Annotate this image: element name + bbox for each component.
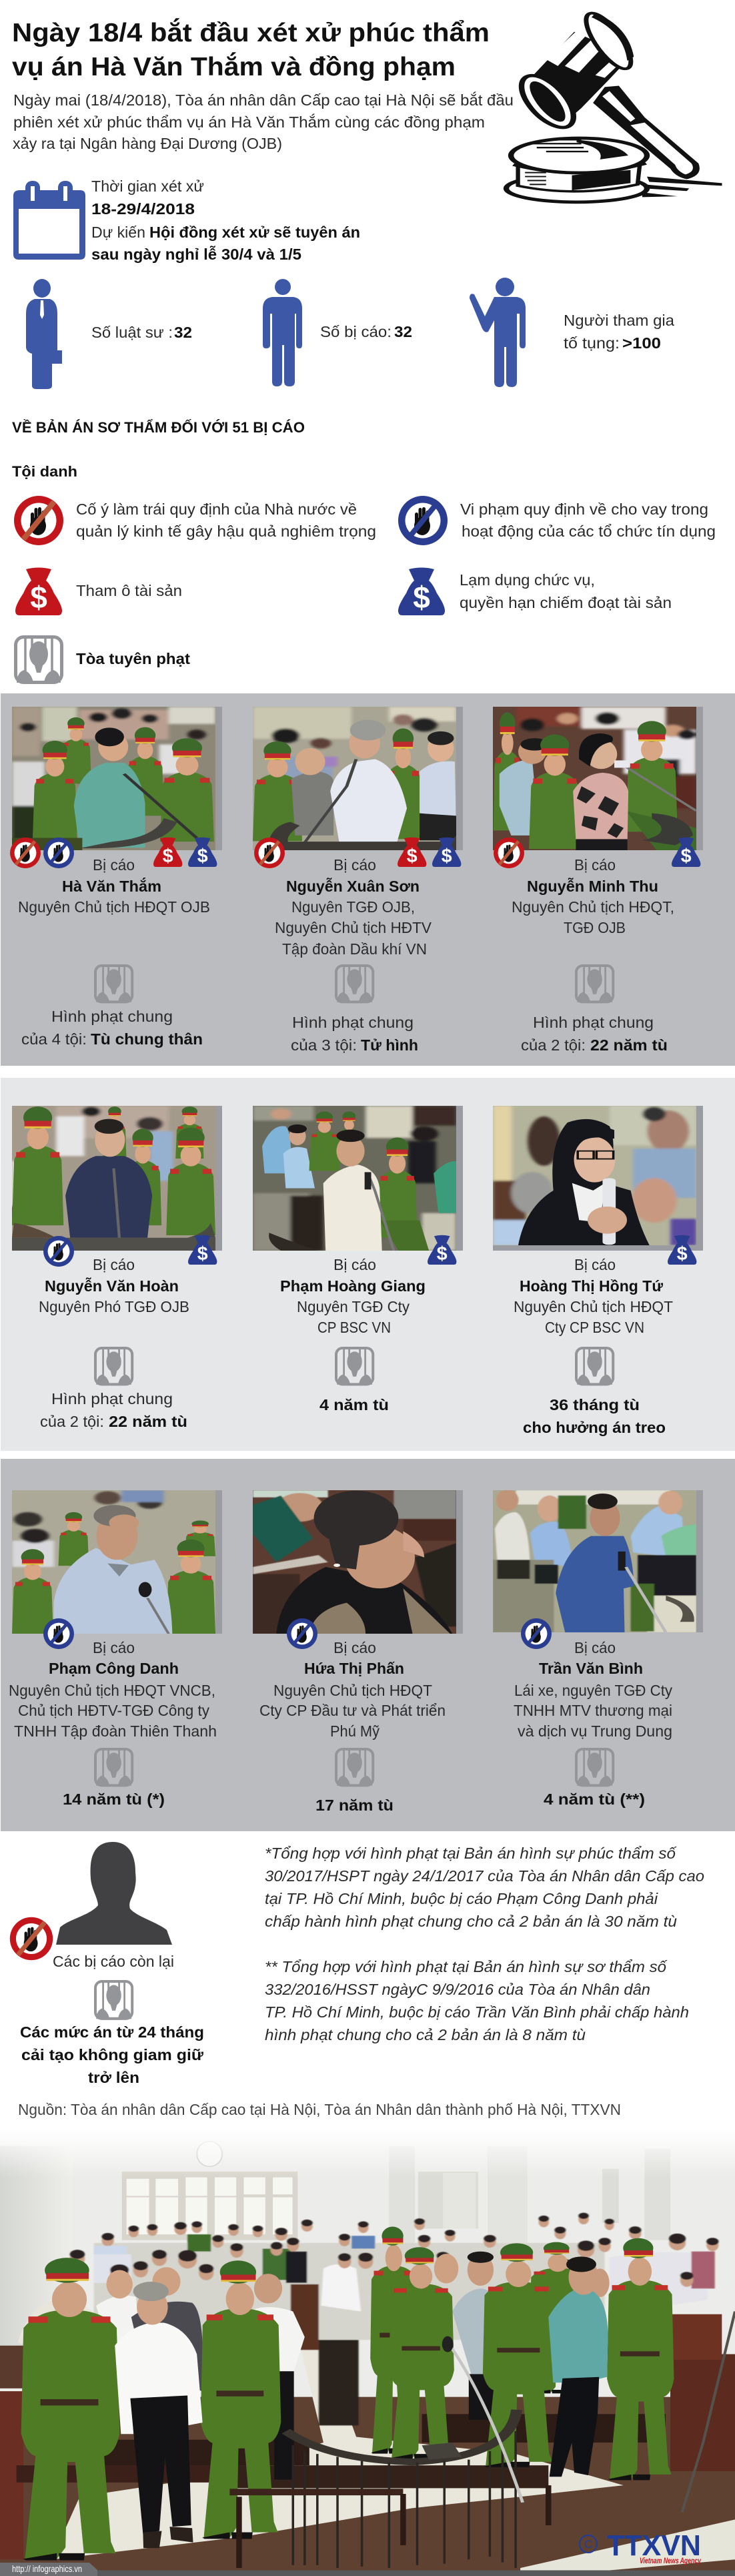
remaining defendants text: cải tạo không giam giữ [21,2046,203,2063]
footnote 2: 332/2016/HSST ngàyC 9/9/2016 của Tòa án Nhân dân [265,1981,650,1998]
profile: Hứa Thị Phấn: Cty CP Đầu tư và Phát triển [259,1702,446,1719]
footnote 2 [265,1958,689,2043]
remaining defendants text [20,1953,204,2086]
sentence: Hoàng Thị Hồng Tứ: 36 tháng tù [550,1396,640,1413]
defendants behind [18,2252,610,2480]
profile: Hoàng Thị Hồng Tứ: Nguyên Chủ tịch HĐQT [514,1298,673,1315]
footnote 1: 30/2017/HSPT ngày 24/1/2017 của Tòa án Nhân dân Cấp cao [265,1867,704,1885]
profile: Phạm Hoàng Giang: CP BSC VN [317,1319,391,1336]
sentence: Hà Văn Thắm: Tù chung thân [91,1030,203,1048]
footer url tab: http:// infographics.vn [12,2563,82,2574]
footnote 1: tại TP. Hồ Chí Minh, buộc bị cáo Phạm Công Danh phải [265,1890,658,1907]
profile: Trần Văn Bình: Bị cáo [574,1639,616,1656]
profile: Nguyễn Minh Thu: Nguyên Chủ tịch HĐQT, [512,898,674,916]
sentence: Nguyễn Xuân Sơn [291,966,418,1054]
lawyers count: Số luật sư : [91,324,173,341]
icon: Phạm Hoàng Giang charge [428,1235,456,1265]
icon: remaining defendants charge [10,1917,53,1960]
legend: abuse of power: Lạm dụng chức vụ, [460,571,595,589]
icon: calendar [13,181,85,260]
title [12,18,490,81]
profile: Phạm Công Danh: Chủ tịch HĐTV-TGĐ Công ty [18,1702,209,1719]
profile: Trần Văn Bình: TNHH MTV thương mại [514,1702,672,1719]
photo: Nguyễn Xuân Sơn [253,707,456,850]
legend: deliberate violation: quản lý kinh tế gây hậu quả nghiêm trọng [76,523,376,540]
profile: Hứa Thị Phấn: Hứa Thị Phấn [304,1660,404,1677]
footnote 2: ** Tổng hợp với hình phạt tại Bản án hình sự sơ thẩm số [265,1958,668,1975]
sentence: Phạm Công Danh: 14 năm tù (*) [63,1791,165,1808]
profile: Trần Văn Bình [514,1639,672,1740]
sentence: Trần Văn Bình [544,1749,645,1808]
participants count: Người tham gia [564,312,674,329]
profile: Phạm Công Danh: TNHH Tập đoàn Thiên Thanh [14,1722,217,1740]
logo: TTXVN [580,2529,702,2565]
legend: embezzlement: Tham ô tài sản [76,582,182,599]
defendants count: 32 [394,323,412,340]
profile: Nguyễn Xuân Sơn: Nguyễn Xuân Sơn [286,877,420,895]
photo: Hà Văn Thắm [12,707,215,850]
sentence: Phạm Hoàng Giang: 4 năm tù [319,1396,389,1413]
profile: Trần Văn Bình: và dịch vụ Trung Dung [518,1722,672,1740]
sentence: Hoàng Thị Hồng Tứ [523,1348,666,1436]
crowd [70,2213,718,2425]
dock rail [229,2311,735,2568]
profile: Hà Văn Thắm: Hà Văn Thắm [62,877,161,895]
participants count: tố tụng: [564,334,620,352]
remaining defendants text: trở lên [88,2069,139,2086]
profile: Hứa Thị Phấn [259,1639,446,1740]
sentence: Hoàng Thị Hồng Tứ: cho hưởng án treo [523,1419,666,1436]
profile: Trần Văn Bình: Lái xe, nguyên TGĐ Cty [514,1682,672,1699]
photo: Nguyễn Văn Hoàn [12,1106,215,1251]
icons: Nguyễn Minh Thu charges [494,838,700,868]
trial schedule text: Thời gian xét xử [91,178,204,195]
icons: Nguyễn Văn Hoàn charges [43,1235,217,1267]
footnote 2: hình phạt chung cho cả 2 bản án là 8 năm tù [265,2026,586,2043]
sentence: Hứa Thị Phấn: 17 năm tù [315,1797,394,1814]
participants count: >100 [622,334,661,352]
sentence: Nguyễn Minh Thu [521,966,668,1054]
sentence: Nguyễn Văn Hoàn: 22 năm tù [109,1413,187,1430]
defendant: teal shirt [548,2256,608,2477]
sentence: Nguyễn Văn Hoàn: Hình phạt chung [51,1390,173,1407]
profile: Phạm Công Danh: Nguyên Chủ tịch HĐQT VNCB, [9,1682,215,1699]
sentence: Phạm Công Danh [63,1749,165,1808]
icon: silhouette of remaining defendants [56,1842,172,1945]
sentence: Hà Văn Thắm [21,966,203,1048]
profile: Phạm Hoàng Giang: Phạm Hoàng Giang [280,1277,426,1295]
legend: lending violation: hoạt động của các tổ chức tín dụng [462,523,716,540]
sentence: Nguyễn Văn Hoàn: của 2 tội: [40,1413,104,1430]
profile: Hứa Thị Phấn: Bị cáo [333,1639,376,1656]
profile: Hoàng Thị Hồng Tứ: Cty CP BSC VN [545,1319,644,1336]
profile: Phạm Công Danh [9,1639,217,1740]
sentence: Hứa Thị Phấn [315,1749,394,1814]
profile: Phạm Hoàng Giang: Bị cáo [333,1256,376,1273]
legend: lending violation: Vi phạm quy định về cho vay trong [460,501,708,518]
legend: embezzlement [15,567,182,615]
logo: TTXVN: Vietnam News Agency [640,2556,702,2565]
profile: Nguyễn Minh Thu: Nguyễn Minh Thu [527,877,658,895]
footnote 2: TP. Hồ Chí Minh, buộc bị cáo Trần Văn Bình phải chấp hành [265,2003,689,2021]
photo: Hoàng Thị Hồng Tứ [493,1106,696,1245]
profile: Hà Văn Thắm: Bị cáo [93,856,135,874]
profile: Phạm Hoàng Giang [280,1256,426,1336]
logo: TTXVN: C [584,2538,592,2551]
profile: Hoàng Thị Hồng Tứ: Hoàng Thị Hồng Tứ [520,1277,663,1295]
heading: charges: Tội danh [12,463,77,480]
icon: Phạm Công Danh charge [43,1618,74,1649]
profile: Nguyễn Xuân Sơn: Tập đoàn Dầu khí VN [282,940,427,958]
legend: lending violation [398,496,716,545]
intro text: Ngày mai (18/4/2018), Tòa án nhân dân Cấp cao tại Hà Nội sẽ bắt đầu [13,91,514,109]
defendant: white shirt [115,2282,203,2548]
legend: sentence [16,637,190,683]
sentence: Hà Văn Thắm: của 4 tội: [21,1030,87,1048]
icon: Hứa Thị Phấn charge [287,1618,317,1649]
remaining defendants text: Các bị cáo còn lại [53,1953,174,1970]
intro text: xảy ra tại Ngân hàng Đại Dương (OJB) [13,135,282,152]
profile: Hà Văn Thắm [18,856,210,916]
logo: TTXVN: TTXVN [607,2529,701,2562]
icons: Nguyễn Xuân Sơn charges [254,838,461,868]
panel: defendants row 1 [1,693,735,1066]
profile: Nguyễn Văn Hoàn: Bị cáo [93,1256,135,1273]
profile: Phạm Hoàng Giang: Nguyên TGĐ Cty [297,1298,410,1315]
trial schedule text [91,178,360,263]
profile: Nguyễn Xuân Sơn: Nguyên TGĐ OJB, [291,898,415,916]
profile: Nguyễn Minh Thu: TGĐ OJB [564,919,626,936]
profile: Hà Văn Thắm: Nguyên Chủ tịch HĐQT OJB [18,898,210,916]
footnote 1 [265,1845,704,1930]
profile: Trần Văn Bình: Trần Văn Bình [539,1660,643,1677]
footer url tab [0,2563,97,2576]
sentence: Nguyễn Xuân Sơn: Tử hình [361,1036,418,1054]
icon: defendant [263,279,302,386]
profile: Nguyễn Văn Hoàn [39,1256,189,1315]
sentence: Nguyễn Minh Thu: Hình phạt chung [533,1014,654,1031]
remaining defendants text: Các mức án từ 24 tháng [20,2023,204,2041]
profile: Nguyễn Minh Thu [512,856,674,936]
profile: Nguyễn Xuân Sơn: Bị cáo [333,856,376,874]
defendants count: Số bị cáo: [320,323,392,340]
sentence: Nguyễn Văn Hoàn [40,1348,187,1430]
profile: Nguyễn Xuân Sơn: Nguyên Chủ tịch HĐTV [275,919,432,936]
icon: gavel [503,12,722,204]
footnote 1: *Tổng hợp với hình phạt tại Bản án hình sự phúc thẩm số [265,1845,677,1862]
profile: Phạm Công Danh: Bị cáo [93,1639,135,1656]
photo: Phạm Hoàng Giang [253,1106,456,1251]
trial schedule text: Dự kiến [91,224,145,241]
profile: Phạm Công Danh: Phạm Công Danh [49,1660,179,1677]
trial schedule text: sau ngày nghỉ lễ 30/4 và 1/5 [91,245,301,263]
profile: Hoàng Thị Hồng Tứ [514,1256,673,1336]
photo: Nguyễn Minh Thu [493,707,696,850]
profile: Hứa Thị Phấn: Nguyên Chủ tịch HĐQT [273,1682,432,1699]
lawyers count: 32 [174,324,192,341]
trial schedule text: Hội đồng xét xử sẽ tuyên án [149,224,360,241]
footnote 1: chấp hành hình phạt chung cho cả 2 bản án là 30 năm tù [265,1913,677,1930]
sentence: Nguyễn Xuân Sơn: Hình phạt chung [292,1014,414,1031]
sentence: Nguyễn Minh Thu: của 2 tội: [521,1036,586,1054]
title: Ngày 18/4 bắt đầu xét xử phúc thẩm [12,18,490,47]
sentence: Trần Văn Bình: 4 năm tù (**) [544,1791,645,1808]
legend: deliberate violation [14,496,376,545]
sentence: Phạm Hoàng Giang [319,1348,389,1413]
participants count [564,312,674,352]
profile: Nguyễn Văn Hoàn: Nguyễn Văn Hoàn [45,1277,179,1295]
profile: Nguyễn Minh Thu: Bị cáo [574,856,616,874]
photo: Trần Văn Bình [493,1490,696,1632]
legend: abuse of power [398,567,672,615]
title: vụ án Hà Văn Thắm và đồng phạm [12,52,456,81]
sentence: Nguyễn Xuân Sơn: của 3 tội: [291,1036,357,1054]
sentence: Nguyễn Minh Thu: 22 năm tù [590,1036,668,1054]
photo: Phạm Công Danh [12,1490,215,1634]
profile: Hoàng Thị Hồng Tứ: Bị cáo [574,1256,616,1273]
intro text [13,91,514,152]
intro text: phiên xét xử phúc thẩm vụ án Hà Văn Thắm cùng các đồng phạm [13,113,485,131]
photo: courtroom [0,2141,735,2576]
legend: abuse of power: quyền hạn chiếm đoạt tài sản [460,594,672,611]
source: Nguồn: Tòa án nhân dân Cấp cao tại Hà Nội, Tòa án Nhân dân thành phố Hà Nội, TTXVN [18,2101,621,2118]
icon: Hoàng Thị Hồng Tứ charge [668,1235,696,1265]
trial schedule text: 18-29/4/2018 [91,200,195,218]
heading: first-instance verdict: VỀ BẢN ÁN SƠ THẨM ĐỐI VỚI 51 BỊ CÁO [12,418,305,436]
panel: defendants row 3 [1,1459,735,1831]
icons: Hà Văn Thắm charges [10,838,217,868]
icon: Trần Văn Bình charge [521,1618,552,1649]
icon: lawyer [26,279,62,389]
legend: deliberate violation: Cố ý làm trái quy định của Nhà nước về [76,501,357,518]
profile: Nguyễn Xuân Sơn [275,856,432,958]
panel: defendants row 2 [1,1078,735,1451]
profile: Nguyễn Văn Hoàn: Nguyên Phó TGĐ OJB [39,1298,189,1315]
floor [0,2314,735,2576]
icon: participant [470,278,526,387]
soldiers [370,2227,418,2454]
legend: sentence: Tòa tuyên phạt [76,650,190,667]
photo: Hứa Thị Phấn [253,1490,456,1634]
profile: Hứa Thị Phấn: Phú Mỹ [330,1722,380,1740]
sentence: Hà Văn Thắm: Hình phạt chung [51,1008,173,1025]
